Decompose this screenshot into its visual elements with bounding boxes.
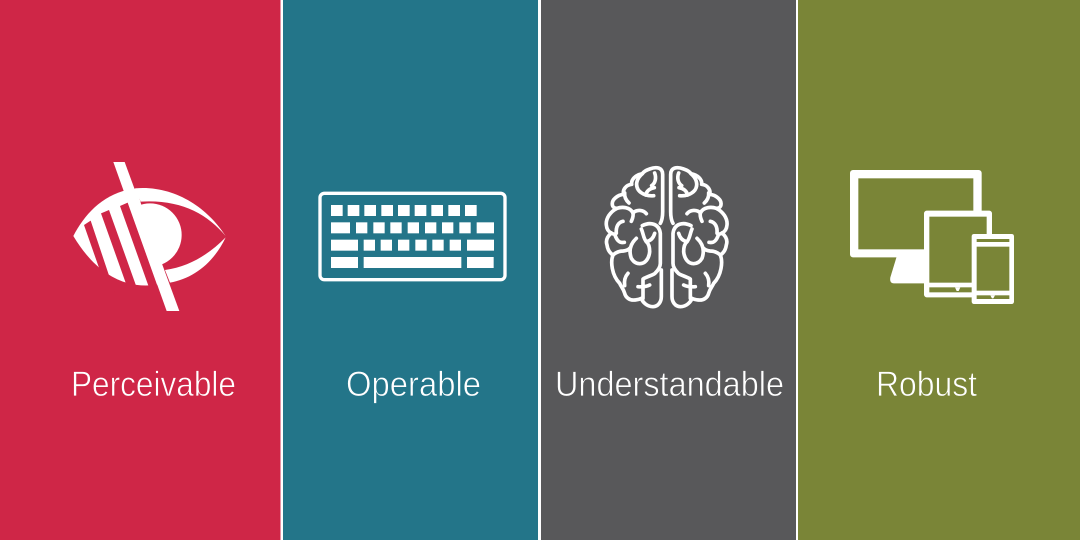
panel: Robust [798,0,1080,540]
panel: Understandable [541,0,796,540]
panel background: red [0,0,280,540]
label: Operable: Operable [346,365,481,404]
label: Robust: Robust [876,365,977,404]
icon: monitor, tablet and phone [850,170,1014,304]
label: Understandable: Understandable [555,365,784,404]
panel background: green [798,0,1080,540]
panel background: teal [283,0,538,540]
icon: crossed-out eye [73,162,226,311]
icon: brain [606,168,727,307]
panel: Perceivable [0,0,280,540]
icon: keyboard [320,193,505,280]
panel: Operable [283,0,538,540]
label: Perceivable: Perceivable [71,365,236,404]
panel background: grey [541,0,796,540]
